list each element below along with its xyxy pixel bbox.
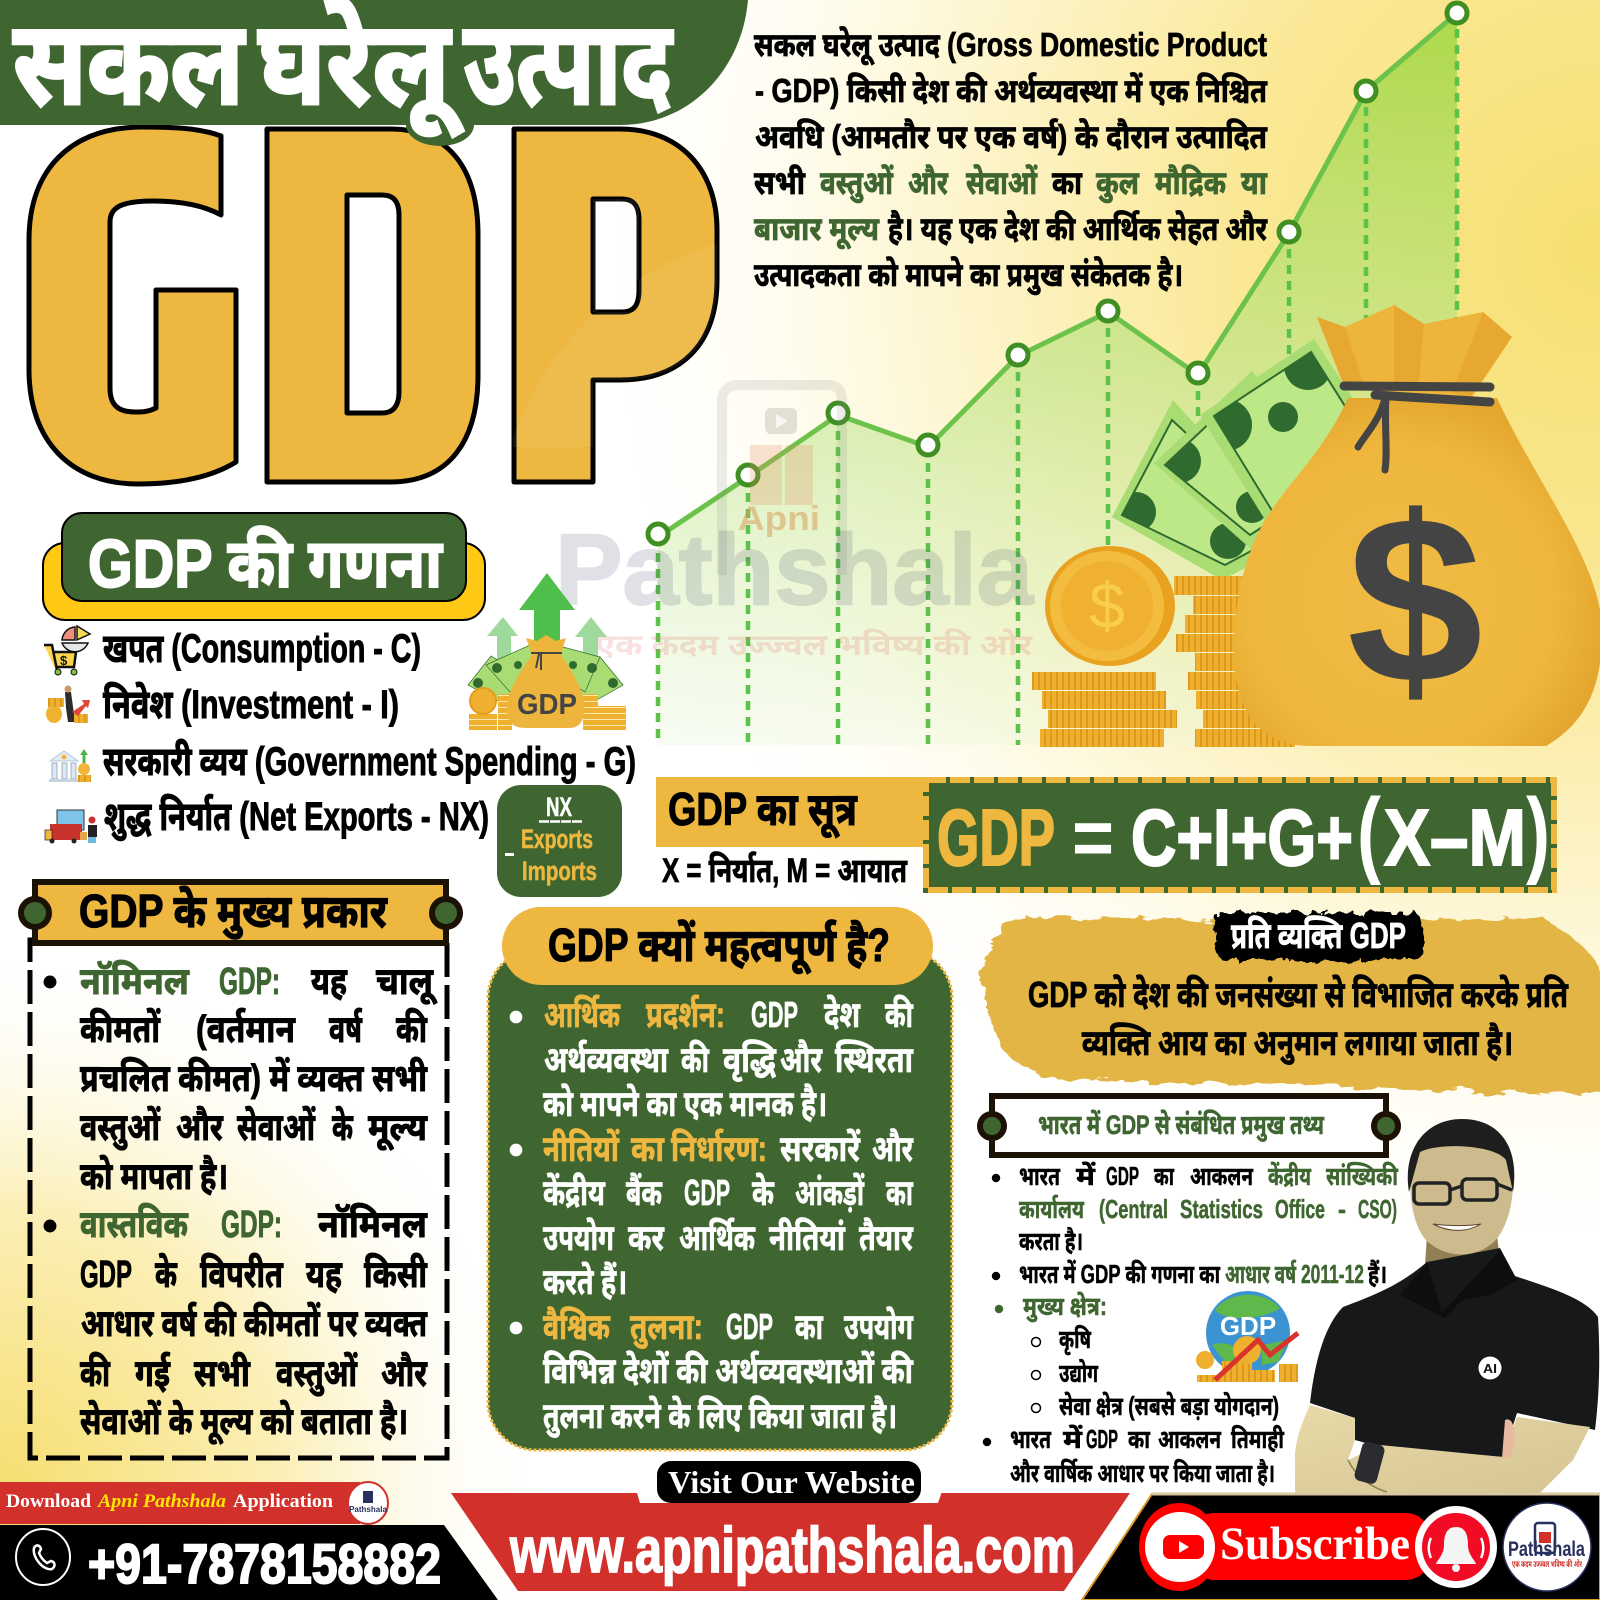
footer: website banner: Visit Our Website [668,1464,915,1500]
arms [1295,1405,1590,1493]
types panel text: वस्तुओं [276,1351,358,1397]
why panel text: GDP [751,994,798,1035]
shirt badge [1478,1356,1502,1380]
why panel text: को मापने का एक मानक है। [543,1082,827,1124]
types panel text: GDP: [221,1204,282,1246]
why panel text: स्थिरता [835,1039,914,1080]
watermark: Apni [738,500,820,538]
GDP components list: खपत (Consumption - C) [103,627,421,671]
panel: India GDP facts [980,1096,1399,1488]
wrist watch [1353,1441,1386,1485]
NX formula box: Imports [522,856,597,886]
why panel text: अर्थव्यवस्था [544,1039,669,1080]
intro paragraph: है। यह एक देश की आर्थिक सेहत और [888,209,1268,247]
per capita text [1028,973,1569,1065]
facts header: भारत में GDP से संबंधित प्रमुख तथ्य [1038,1109,1325,1141]
NX formula box: Exports [521,824,593,854]
why panel text: आर्थिक [679,1217,756,1258]
panel: main types of GDP [21,882,460,1458]
types panel text: वर्ष [329,1007,363,1051]
heading: GDP calculation [43,513,485,620]
intro paragraph: मौद्रिक [1155,164,1226,201]
icon: GDP money bag with arrows [468,573,626,730]
types panel text: को मापता है। [80,1154,228,1198]
why panel text: की [885,994,914,1035]
footer: download app bar: Application [233,1491,333,1512]
facts list: Statistics [1180,1194,1263,1224]
types panel text: सेवाओं [237,1105,316,1149]
footer: download app bar: Apni Pathshala [97,1491,227,1512]
why panel text: और [872,1128,914,1169]
big GDP letters [29,127,717,484]
why panel text: GDP [684,1172,730,1213]
icon: globe with GDP [1196,1291,1298,1382]
intro paragraph [754,25,1268,296]
why panel text: की [681,1039,710,1080]
title banner: सकल [13,0,246,130]
watermark [555,385,1034,662]
facts list: आकलन [1190,1161,1254,1191]
icon: government building with coin [49,749,91,782]
watermark: Pathshala [555,514,1034,626]
why panel text: का [886,1172,914,1213]
intro paragraph: और [908,164,949,201]
types panel text: की [396,1007,428,1051]
icon: investor with coins [46,686,90,723]
per capita brush background [980,918,1600,1095]
types panel text: की [80,1351,111,1395]
title banner: उत्पाद [463,0,673,130]
face [1410,1125,1513,1254]
why panel text: वैश्विक [543,1305,611,1347]
why panel header [502,907,933,985]
why panel body [488,950,952,1450]
footer: phone number bar [0,1525,498,1600]
intro paragraph: अवधि (आमतौर पर एक वर्ष) के दौरान उत्पादित [755,117,1267,155]
footer: phone number bar: +91-7878158882 [88,1532,441,1595]
formula box: X–M [1384,793,1526,882]
GDP components list: निवेश (Investment - I) [103,682,399,727]
why panel text: और [780,1039,823,1080]
types panel text: किसी [364,1252,428,1296]
types panel text: नॉमिनल [318,1202,428,1246]
icon: globe with GDP: GDP [1220,1311,1276,1341]
types panel text: कीमतों [80,1007,161,1051]
facts list: भारत [1010,1424,1052,1454]
per capita black badge [1214,912,1424,960]
glasses [1414,1179,1512,1204]
watermark: एक कदम उज्ज्वल भविष्य की ओर [595,628,1033,662]
facts list: में [1076,1161,1096,1191]
formula box: GDP [937,793,1055,882]
why panel text: तुलना: [630,1306,703,1349]
types panel text: वास्तविक [80,1202,189,1246]
why panel text: प्रदर्शन: [646,994,725,1035]
neck [1425,1235,1500,1315]
intro paragraph: वस्तुओं [820,164,894,204]
why panel header: GDP क्यों महत्वपूर्ण है? [548,919,890,975]
facts list: सांख्यिकी [1326,1161,1399,1191]
GDP components list: सरकारी व्यय (Government Spending - G) [103,739,636,784]
types panel text: और [381,1351,428,1395]
money bag with dollar sign: $ [1347,468,1483,733]
banknotes behind the bag [1112,339,1352,576]
facts list: (Central [1099,1194,1168,1224]
types panel header: GDP के मुख्य प्रकार [79,884,388,939]
types panel text: सेवाओं के मूल्य को बताता है। [80,1399,408,1445]
why panel text: GDP [726,1306,773,1347]
why panel text: विभिन्न देशों की अर्थव्यवस्थाओं की [543,1349,914,1391]
types panel text: GDP [80,1254,132,1296]
formula box: ) [1526,779,1550,886]
panel: per capita GDP [980,912,1600,1095]
why panel text: तुलना करने के लिए किया जाता है। [543,1394,897,1438]
footer: subscribe bar [1082,1494,1600,1600]
facts list: GDP [1106,1161,1139,1191]
intro paragraph: सकल घरेलू उत्पाद (Gross Domestic Product [754,25,1267,66]
types panel frame [30,940,447,1458]
facts header [980,1096,1398,1155]
types panel text: (वर्तमान [196,1007,296,1051]
facts list: सेवा क्षेत्र (सबसे बड़ा योगदान) [1059,1391,1279,1421]
why panel text: उपयोग [844,1306,914,1347]
facts list: उद्योग [1059,1358,1099,1388]
footer: website banner: www.apnipathshala.com [509,1514,1075,1586]
facts list: Office [1275,1194,1325,1224]
facts list [983,1161,1399,1488]
facts list: का [1128,1424,1151,1454]
types panel text: सभी [194,1351,251,1395]
hair [1408,1119,1514,1192]
NX formula box: NX [546,792,572,822]
facts list: कृषि [1059,1324,1091,1355]
types panel text: GDP: [219,961,280,1003]
types panel text: वस्तुओं [80,1105,161,1151]
types panel text: प्रचलित कीमत) में व्यक्त सभी [80,1056,428,1100]
GDP components list: शुद्ध निर्यात (Net Exports - NX) [104,794,489,841]
types panel text [44,959,437,1445]
types panel text: आधार वर्ष की कीमतों पर व्यक्त [81,1301,428,1345]
why panel text: नीतियों [543,1128,620,1169]
types panel text: यह [311,961,348,1003]
facts list: और वार्षिक आधार पर किया जाता है। [1010,1458,1275,1488]
formula box: C+I+G+ [1131,793,1353,882]
why panel text: का [631,1128,665,1169]
why panel text: उपयोग [543,1217,615,1258]
facts list: GDP [1086,1424,1118,1454]
per capita black badge: प्रति व्यक्ति GDP [1231,915,1406,956]
intro paragraph: सभी [754,164,806,201]
intro paragraph: - GDP) किसी देश की अर्थव्यवस्था में एक निश्चित [755,71,1267,109]
why panel text: आंकड़ों [795,1172,865,1213]
why panel text: कर [628,1217,665,1258]
coin and coin stacks: $ [1089,570,1125,642]
why panel text: देश [824,993,861,1035]
icon: export truck [45,810,97,844]
footer: website banner [451,1461,1130,1591]
why panel text: निर्धारण: [671,1128,767,1169]
smile [1433,1224,1481,1230]
types panel text: चालू [376,961,437,1005]
formula box [923,777,1557,893]
polo shirt [1310,1248,1599,1457]
GDP components list [103,627,636,841]
facts list: में [1063,1424,1083,1454]
why panel text: नीतियां [769,1217,846,1258]
intro paragraph: बाजार मूल्य [754,210,880,250]
why panel text: केंद्रीय [543,1172,606,1213]
footer: download app bar: Pathshala [349,1505,387,1514]
intro paragraph: उत्पादकता को मापने का प्रमुख संकेतक है। [754,255,1183,296]
formula label: GDP का सूत्र [668,783,858,839]
intro paragraph: कुल [1096,164,1140,204]
facts list: हैं। [1368,1259,1387,1289]
types panel text: मूल्य [368,1107,428,1151]
facts list: का [1154,1161,1175,1191]
facts list: कार्यालय [1019,1194,1084,1224]
fingers [1502,1419,1515,1458]
panel: why GDP matters [488,907,952,1450]
footer: download app bar [0,1482,388,1524]
NX formula box [497,785,622,897]
types panel text: गई [135,1351,171,1395]
facts list: CSO) [1358,1194,1397,1224]
facts list: भारत [1019,1161,1061,1191]
title banner [0,0,748,146]
types panel text: यह [306,1254,343,1296]
icon: shopping cart with pie chart: $ [60,653,68,668]
facts list: आधार वर्ष 2011-12 [1225,1259,1364,1289]
intro paragraph: या [1241,164,1268,201]
presenter figure [1295,1119,1599,1493]
types panel text: के [155,1252,178,1296]
why panel text: तैयार [859,1216,914,1258]
intro paragraph: सेवाओं [966,163,1038,201]
facts list: भारत में GDP की गणना का [1019,1259,1221,1289]
title banner: घरेलू [258,0,464,138]
why panel text [510,993,914,1438]
icon: shopping cart with pie chart [44,626,90,675]
why panel text: वृद्धि [723,1039,777,1083]
facts list: - [1338,1194,1346,1224]
footer: subscribe bar: Subscribe [1220,1518,1410,1570]
types panel text: और [176,1105,224,1149]
why panel text: का [795,1306,824,1347]
types panel text: विपरीत [200,1252,284,1296]
icon: GDP money bag with arrows: GDP [517,689,577,721]
formula label: X = निर्यात, M = आयात [662,851,908,890]
facts list: केंद्रीय [1268,1161,1311,1191]
why panel text: बैंक [626,1172,663,1213]
formula box: ( [1357,779,1381,886]
footer: download app bar: Download [6,1491,91,1512]
why panel text: के [752,1171,775,1213]
money bag with dollar sign [1234,305,1600,746]
formula label [656,777,924,890]
shirt collar and placket [1400,1250,1517,1318]
letter highlight swoosh [513,199,717,447]
shirt badge: AI [1483,1361,1497,1376]
arm crease [1348,1460,1387,1492]
line chart: rising GDP [648,3,1467,745]
coin and coin stacks [1032,546,1303,747]
intro paragraph: का [1052,164,1083,201]
facts list: मुख्य क्षेत्र: [1023,1291,1107,1322]
facts list: आकलन [1158,1424,1222,1454]
why panel text: करते हैं। [543,1260,627,1302]
formula box: = [1072,793,1114,882]
types panel text: नॉमिनल [80,959,190,1003]
why panel text: सरकारें [780,1128,861,1169]
why panel text: आर्थिक [544,994,621,1035]
heading: GDP calculation: GDP की गणना [88,526,444,602]
facts list: करता है। [1019,1226,1083,1256]
facts list: तिमाही [1231,1424,1285,1454]
types panel text: के [332,1105,354,1149]
